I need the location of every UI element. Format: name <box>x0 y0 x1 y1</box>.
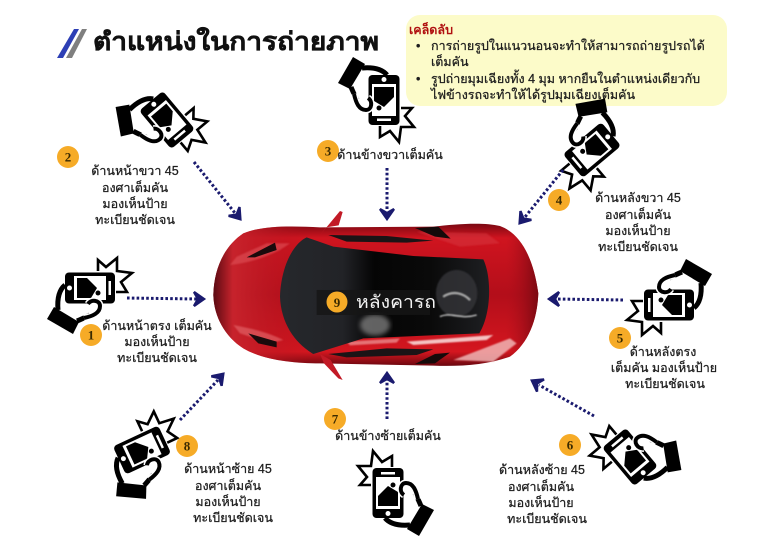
side windows <box>328 235 433 243</box>
badge 9 <box>326 292 348 312</box>
tips list: เต็มคัน <box>431 54 469 69</box>
label 2: องศาเต็มคัน <box>102 180 169 195</box>
label 5: ทะเบียนชัดเจน <box>625 377 705 391</box>
badge 2 <box>57 146 79 168</box>
icon: hand and phone 1 <box>47 258 132 334</box>
arrow 1 <box>127 292 204 306</box>
label 4: องศาเต็มคัน <box>605 207 672 222</box>
label 2: ด้านหน้าขวา 45 <box>91 164 179 178</box>
label 1: ทะเบียนชัดเจน <box>117 351 197 365</box>
label 1 <box>102 318 212 365</box>
icon: hand and phone 6 <box>580 395 693 509</box>
label 4 <box>595 191 681 254</box>
label 2 <box>91 164 179 227</box>
icon: hand and phone 2 <box>104 68 217 182</box>
badge 2: 2 <box>65 150 71 164</box>
badge 5: 5 <box>617 330 624 346</box>
icon: hand and phone 8 <box>90 405 200 510</box>
canopy glare <box>360 314 390 336</box>
glass canopy <box>280 237 489 354</box>
tips list: การถ่ายรูปในแนวนอนจะทำให้สามารถถ่ายรูปรถได้ <box>431 39 705 54</box>
icon: hand and phone 4 <box>530 87 644 200</box>
badge 9: 9 <box>334 295 341 310</box>
label 6 <box>499 463 587 526</box>
badge 6: 6 <box>567 438 574 452</box>
roof label: หลังคารถ <box>356 292 436 312</box>
label 1: ด้านหน้าตรง เต็มคัน <box>102 318 212 333</box>
label 4: ทะเบียนชัดเจน <box>598 240 678 254</box>
panel: position 3 <box>317 57 443 219</box>
badge 4 <box>548 189 570 211</box>
car body <box>213 224 538 366</box>
panel: position 1 <box>47 258 212 365</box>
icon: hand and phone 3 <box>338 57 414 142</box>
tips list: รูปถ่ายมุมเฉียงทั้ง 4 มุม หากยืนในตำแหน่งเดียวกับ <box>431 69 700 87</box>
label 6: ด้านหลังซ้าย 45 <box>499 463 585 477</box>
body highlights <box>230 232 517 362</box>
label 5: เต็มคัน มองเห็นป้าย <box>611 360 717 375</box>
label 4: ด้านหลังขวา 45 <box>595 191 681 205</box>
icon: hand and phone 5 <box>627 259 712 335</box>
mirrors <box>319 211 343 236</box>
label 1: มองเห็นป้าย <box>124 334 190 349</box>
label 3: ด้านข้างขวาเต็มคัน <box>337 147 443 162</box>
badge 7 <box>324 408 346 430</box>
badge 4: 4 <box>556 192 563 208</box>
panel: position 5 <box>549 259 717 391</box>
tips heading: เคล็ดลับ <box>409 22 453 37</box>
label 8: ด้านหน้าซ้าย 45 <box>184 462 272 476</box>
badge 8: 8 <box>184 438 191 454</box>
badge 7: 7 <box>332 412 339 426</box>
label 8: ทะเบียนชัดเจน <box>193 511 273 525</box>
roof label bar <box>317 290 430 315</box>
label 5: ด้านหลังตรง <box>630 345 696 359</box>
panel: position 8 <box>90 369 273 525</box>
tips list: • <box>416 39 420 53</box>
badge 1: 1 <box>88 328 94 342</box>
vents <box>247 243 277 257</box>
badge 3 <box>317 140 339 162</box>
arrow 3 <box>380 168 394 219</box>
icon: title stripes <box>57 29 87 58</box>
panel: car top view <box>213 211 538 380</box>
panel: position 4 <box>514 87 681 254</box>
label 2: ทะเบียนชัดเจน <box>95 213 175 227</box>
label 2: มองเห็นป้าย <box>102 196 168 211</box>
icon: hand and phone 7 <box>358 451 434 536</box>
title block <box>57 26 379 58</box>
tips list <box>416 39 705 103</box>
arrow 8 <box>180 369 228 420</box>
badge 1 <box>80 324 102 346</box>
arrow 4 <box>514 170 563 228</box>
label 8: องศาเต็มคัน <box>195 478 262 493</box>
arrow 5 <box>549 292 623 306</box>
panel: position 6 <box>499 374 693 526</box>
label 4: มองเห็นป้าย <box>605 223 671 238</box>
label 6: มองเห็นป้าย <box>508 495 574 510</box>
engine detail <box>436 270 477 317</box>
tips list: ไฟข้างรถจะทำให้ได้รูปมุมเฉียงเต็มคัน <box>430 87 635 103</box>
badge 8 <box>176 435 198 457</box>
title: ตำแหน่งในการถ่ายภาพ <box>93 26 379 56</box>
badge 3: 3 <box>325 144 332 158</box>
label 5 <box>611 345 717 391</box>
label 7: ด้านข้างซ้ายเต็มคัน <box>335 428 441 443</box>
label 8: มองเห็นป้าย <box>195 494 261 509</box>
arrow 2 <box>194 162 246 224</box>
badge 5 <box>609 327 631 349</box>
badge 6 <box>559 434 581 456</box>
label 6: ทะเบียนชัดเจน <box>507 512 587 526</box>
arrow 7 <box>380 373 394 419</box>
panel: tips <box>406 15 727 106</box>
label 6: องศาเต็มคัน <box>508 479 575 494</box>
label 8 <box>184 462 273 525</box>
tips list: • <box>416 72 420 86</box>
panel: position 7 <box>324 373 441 536</box>
arrow 6 <box>528 374 594 416</box>
panel: position 2 <box>57 68 246 227</box>
